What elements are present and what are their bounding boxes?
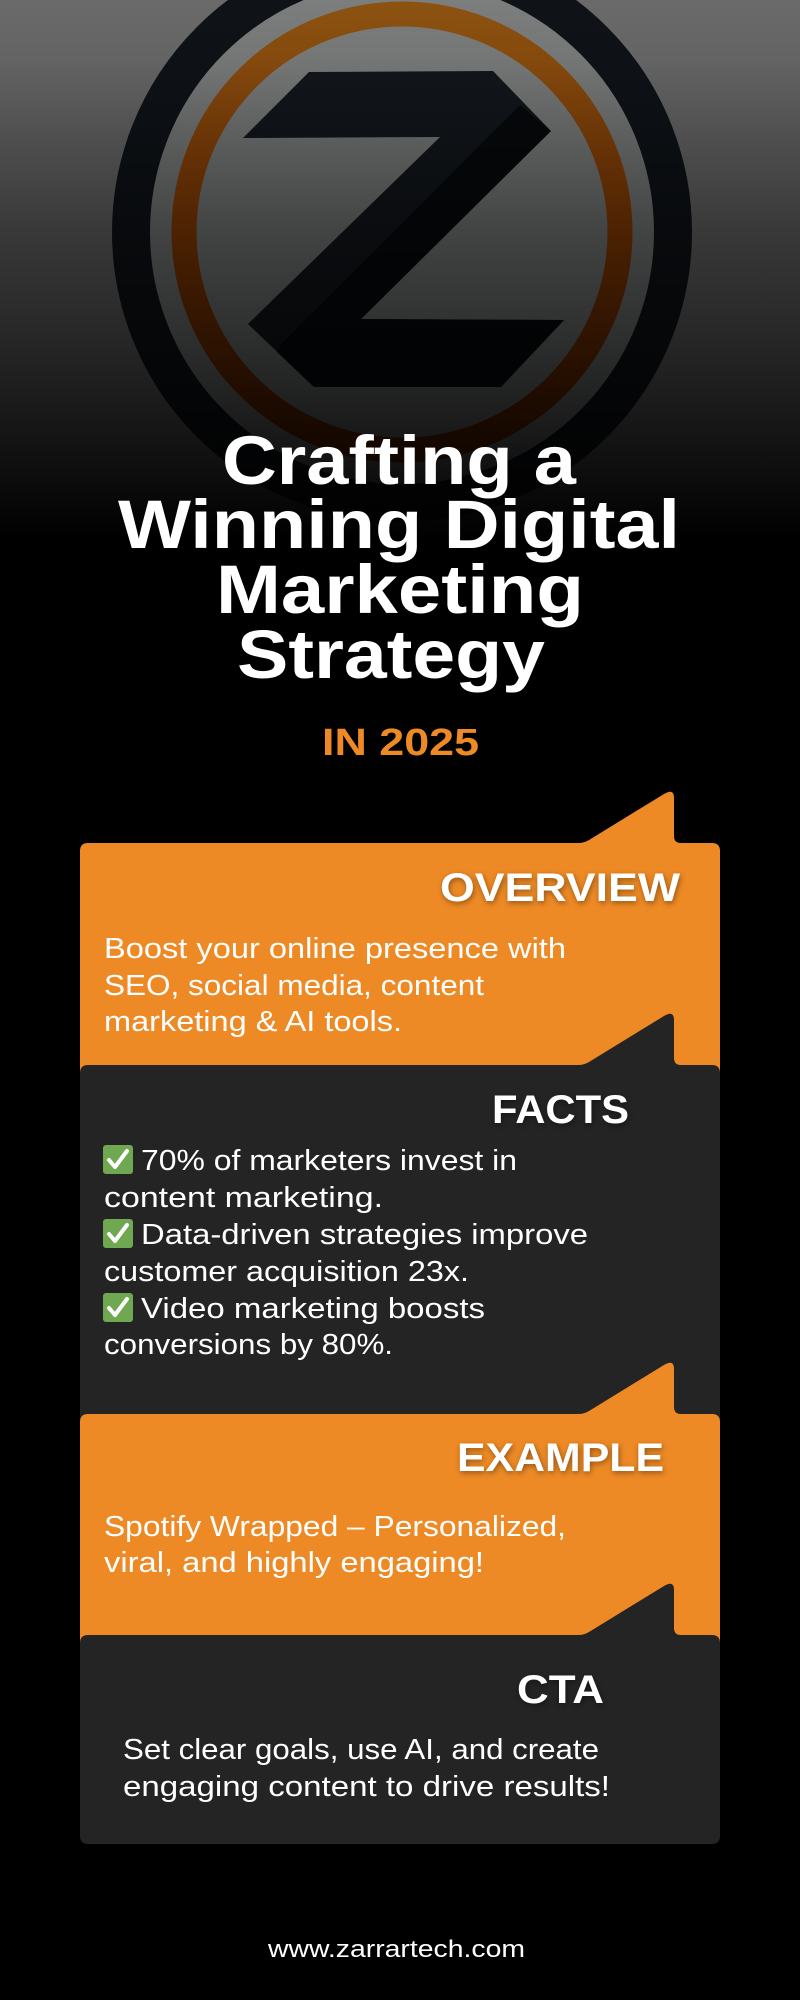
panel shape: overview [80,792,720,1080]
footer url: www.zarrartech.com [267,1936,525,1963]
heading: cta: CTA [517,1668,604,1712]
fact 1 [103,1145,517,1214]
text: overview body [104,933,566,1038]
icon: check mark [103,1293,133,1322]
title [118,422,680,693]
heading: overview: OVERVIEW [440,866,680,910]
fact 1: content marketing. [104,1182,383,1214]
fact 2: Data-driven strategies improve [141,1219,588,1251]
fact 3 [103,1293,485,1361]
panel shape: facts [80,1014,720,1430]
text: cta body: Set clear goals, use AI, and create [123,1734,599,1766]
icon: check mark [103,1145,133,1174]
subtitle: IN 2025 [322,722,479,764]
panel: overview [80,792,720,1080]
fact 1: 70% of marketers invest in [141,1145,517,1177]
text: example body: viral, and highly engaging! [104,1547,484,1579]
title: Marketing [216,551,584,628]
title: Crafting a [222,422,577,499]
text: cta body [123,1734,610,1803]
heading: facts: FACTS [492,1088,629,1132]
title: Strategy [237,616,545,693]
text: overview body: marketing & AI tools. [104,1006,402,1038]
heading: example: EXAMPLE [457,1436,664,1480]
text: example body: Spotify Wrapped – Personalized, [104,1511,566,1543]
logo hero image [0,0,800,540]
fact 3: conversions by 80%. [104,1329,393,1361]
icon: orange ring [184,14,620,450]
fact 2: customer acquisition 23x. [104,1256,469,1288]
text: example body [104,1511,566,1579]
icon: inner plate [147,0,657,487]
fact 3: Video marketing boosts [141,1293,485,1325]
icon: check mark [103,1219,133,1248]
panel shape: cta [80,1584,720,1844]
gradient fade overlay [0,0,800,540]
text: overview body: Boost your online presence with [104,933,566,965]
fact 2 [103,1219,588,1288]
panel: facts [80,1014,720,1430]
panel shape: example [80,1363,720,1650]
text: overview body: SEO, social media, content [104,970,484,1002]
text: cta body: engaging content to drive results! [123,1771,610,1803]
icon: outer dark ring [131,0,673,503]
title: Winning Digital [118,486,680,563]
icon: Z letter [243,71,564,387]
panel: cta [80,1584,720,1844]
panel: example [80,1363,720,1650]
